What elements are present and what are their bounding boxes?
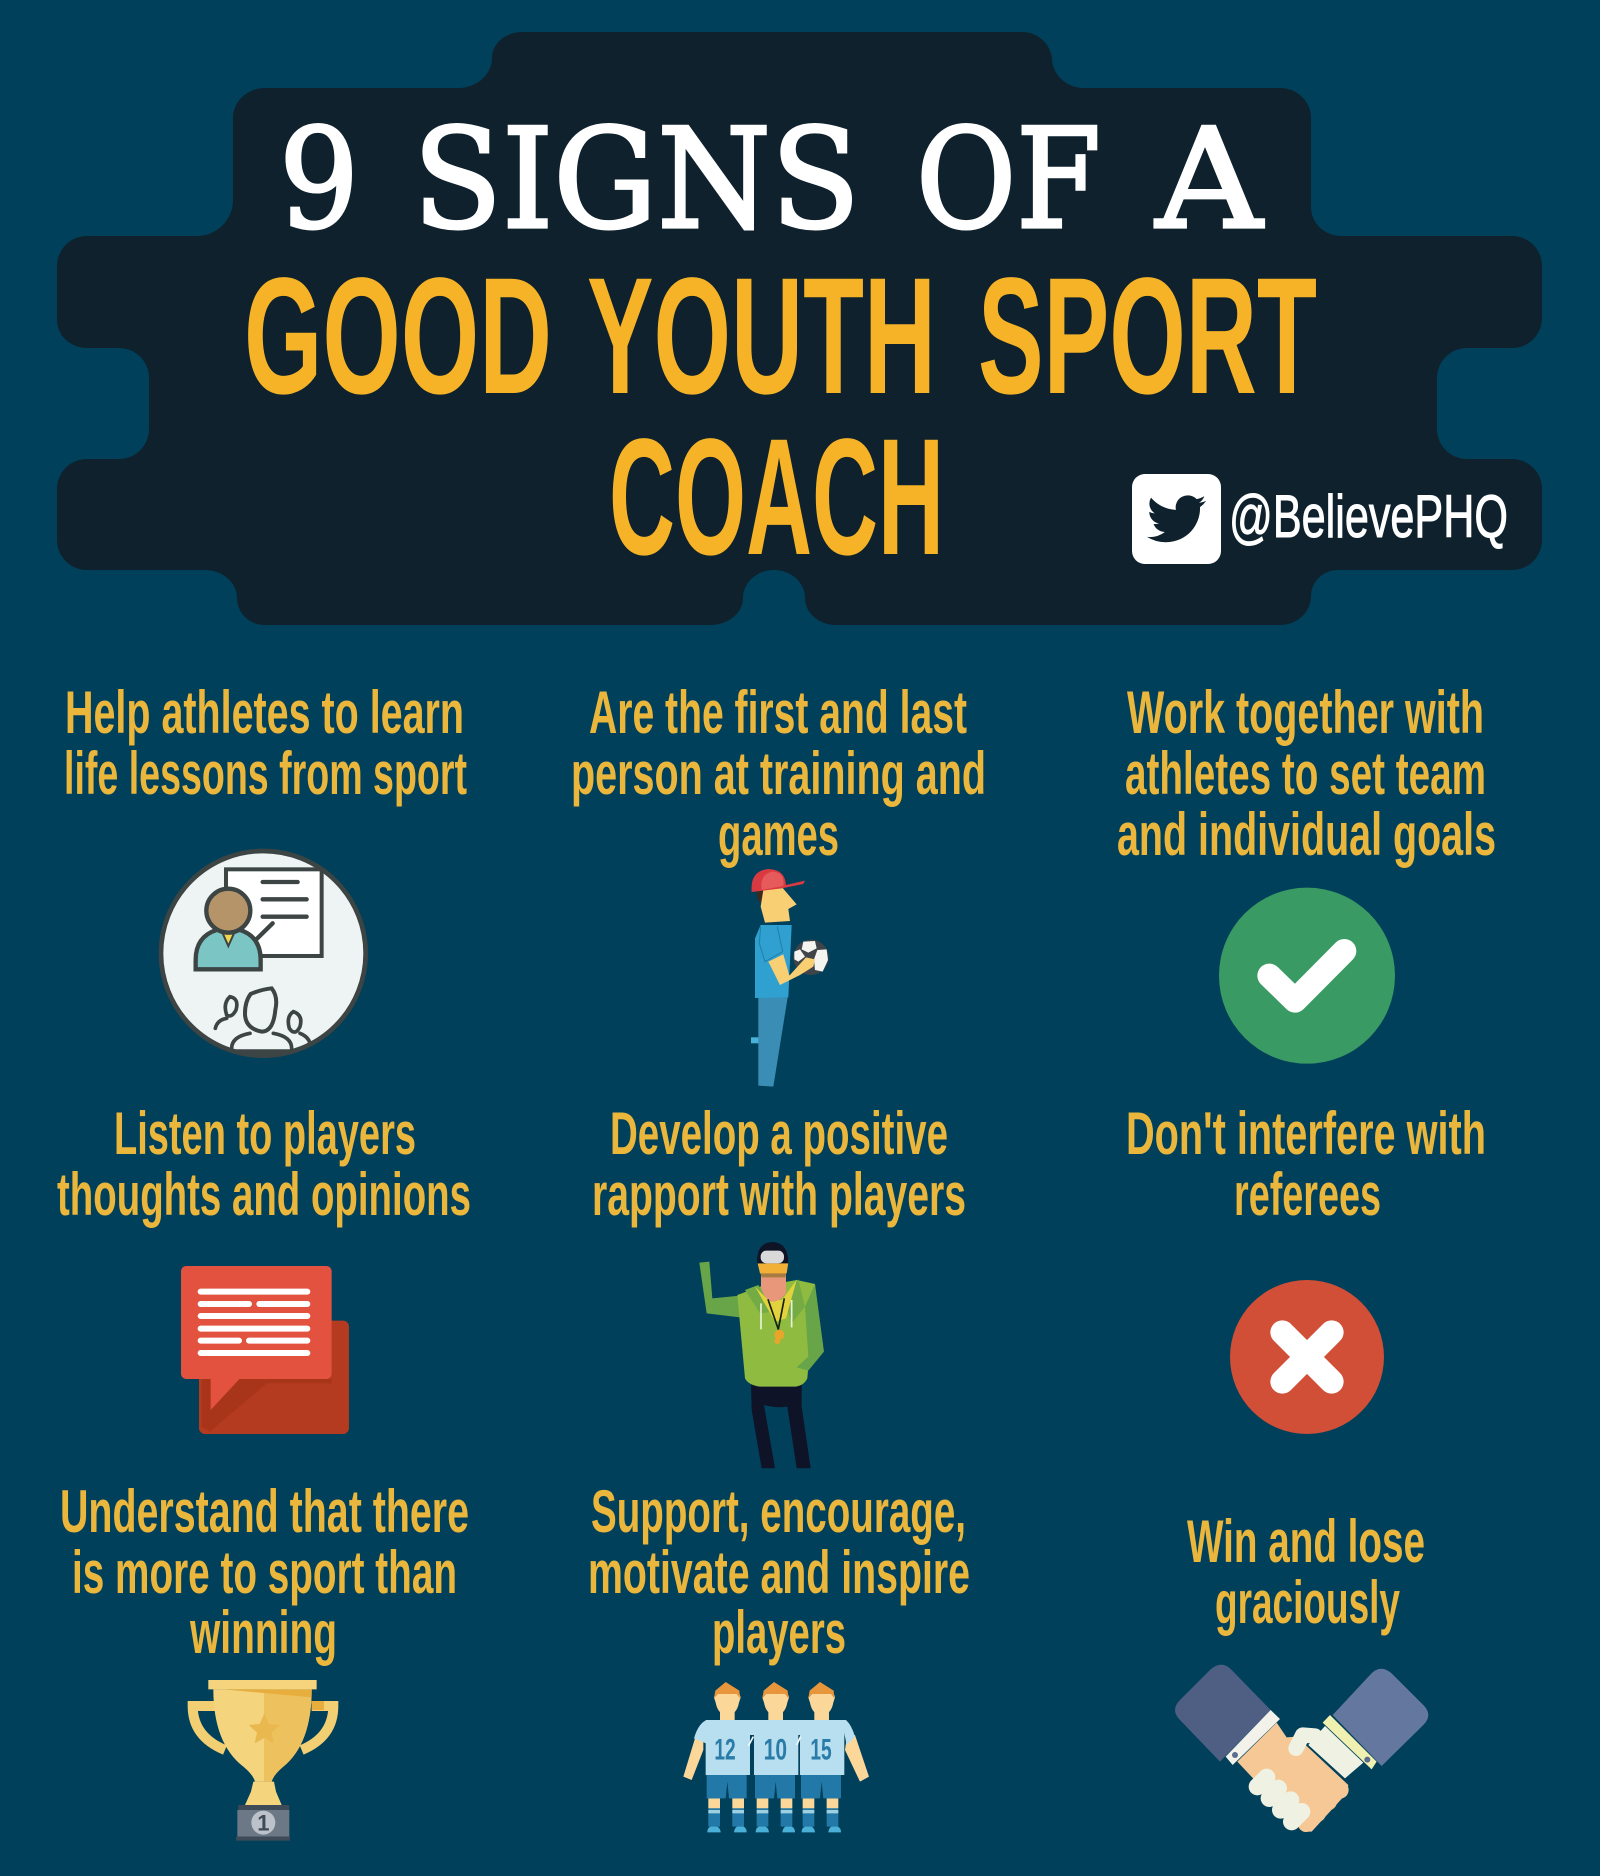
icon: twitter [1132, 474, 1221, 564]
sign 7 text: Understand that there [60, 1478, 469, 1545]
sign 8 text: motivate and inspire [588, 1539, 970, 1606]
sign 4 text: thoughts and opinions [57, 1161, 471, 1228]
icon: trophy [193, 1680, 333, 1841]
title line 1: 9 [279, 99, 359, 260]
sign 4 text [57, 1100, 471, 1228]
title line 1: SIGNS [413, 99, 860, 260]
sign 2 text: person at training and [571, 740, 986, 807]
sign 2 text: games [718, 801, 839, 868]
icon: three players: 10 [764, 1733, 787, 1766]
title line 1: OF [916, 99, 1101, 260]
icon: handshake [1175, 1665, 1428, 1832]
sign 1 text: Help athletes to learn [65, 679, 464, 746]
icon: three players: 15 [810, 1733, 832, 1766]
icon: coach at whiteboard [161, 851, 366, 1056]
icon: green check [1219, 888, 1395, 1064]
sign 9 text: Win and lose [1187, 1508, 1425, 1575]
title line 1: A [1155, 99, 1263, 260]
sign 9 text: graciously [1215, 1569, 1400, 1636]
sign 9 text [1187, 1508, 1425, 1636]
sign 7 text: winning [189, 1599, 337, 1666]
sign 5 text: rapport with players [592, 1161, 966, 1228]
sign 7 text [60, 1478, 469, 1666]
icon: coach with ball [751, 869, 829, 1087]
sign 1 text: life lessons from sport [64, 740, 467, 807]
title banner [57, 32, 1542, 625]
sign 8 text: players [712, 1599, 846, 1666]
title line 2: YOUTH [587, 244, 936, 429]
icon: three players: 12 [714, 1733, 736, 1766]
icon: three players [683, 1682, 869, 1832]
sign 1 text [64, 679, 467, 807]
icon: chat bubbles [181, 1266, 349, 1434]
title line 2: GOOD [244, 244, 552, 429]
title line 3: COACH [609, 405, 944, 590]
sign 8 text: Support, encourage, [591, 1478, 966, 1545]
icon: coach with whistle [699, 1242, 824, 1468]
sign 6 text [1126, 1100, 1486, 1228]
icon: red cross [1230, 1280, 1384, 1434]
sign 6 text: referees [1234, 1161, 1381, 1228]
icon: trophy: 1 [257, 1811, 269, 1836]
title line 2: SPORT [978, 244, 1317, 429]
sign 5 text: Develop a positive [610, 1100, 948, 1167]
sign 5 text [592, 1100, 966, 1228]
sign 3 text [1117, 679, 1496, 868]
sign 4 text: Listen to players [114, 1100, 416, 1167]
sign 7 text: is more to sport than [72, 1539, 457, 1606]
sign 2 text [571, 679, 986, 868]
sign 8 text [588, 1478, 970, 1666]
title line 2 [244, 244, 1317, 429]
sign 2 text: Are the first and last [589, 679, 967, 746]
title line 1 [279, 99, 1263, 260]
